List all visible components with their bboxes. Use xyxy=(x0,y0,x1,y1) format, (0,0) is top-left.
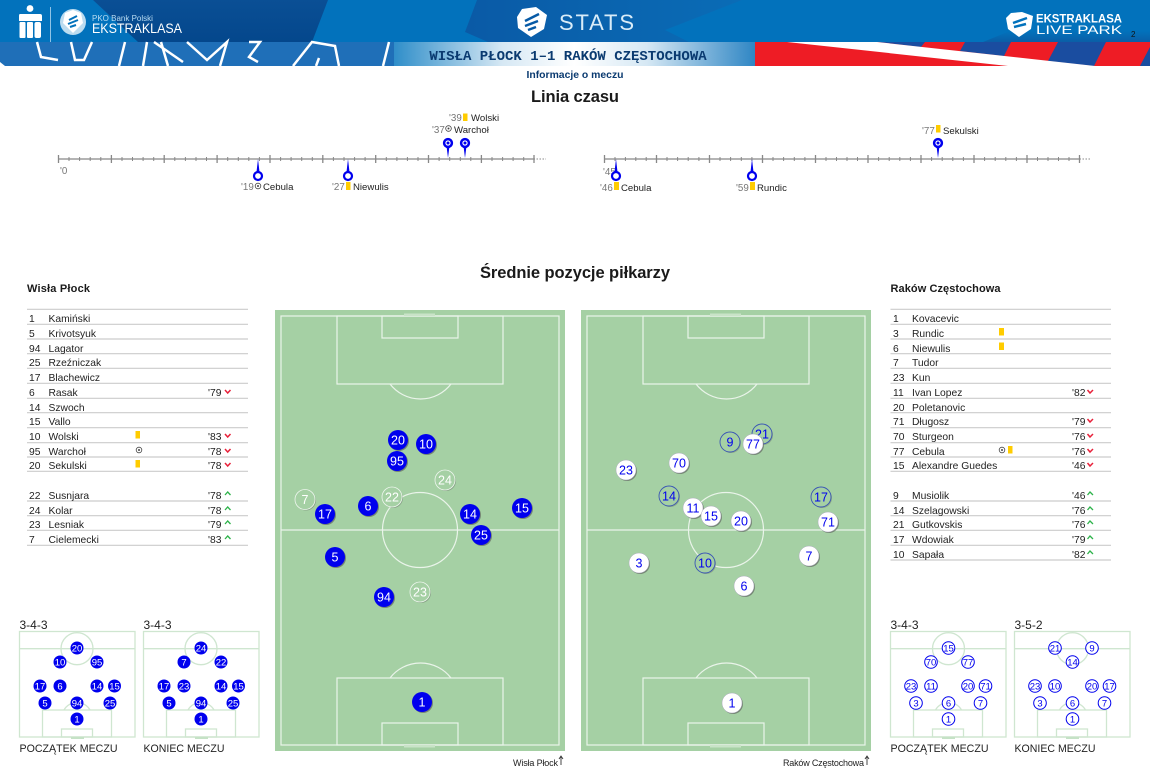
substitutes: Susnjara xyxy=(48,491,89,502)
formation: Raków end: 3 xyxy=(1037,698,1043,710)
formation: Wisła start: 3-4-3 xyxy=(20,618,48,632)
player markers: 17 xyxy=(814,490,828,504)
starting players: Długosz xyxy=(912,417,949,428)
starting players: Krivotsyuk xyxy=(48,329,97,340)
event: 37 Warchoł goal xyxy=(432,125,490,158)
formation: Wisła start: 20 xyxy=(72,644,82,654)
formation: Raków end xyxy=(1014,618,1130,755)
player markers: 70 xyxy=(672,456,686,470)
starting players: 11 xyxy=(893,388,904,399)
formation: Wisła end: 15 xyxy=(233,682,244,692)
starting players: '76 xyxy=(1072,447,1086,458)
header bar xyxy=(0,0,1150,42)
formation: Wisła end: KONIEC MECZU xyxy=(144,743,224,755)
starting players: 1 xyxy=(893,314,899,325)
player markers: 20 xyxy=(734,514,748,528)
starting players: '82 xyxy=(1072,388,1086,399)
event: 39 Wolski card: Wolski xyxy=(471,113,499,124)
formation: Raków end: 21 xyxy=(1050,644,1060,654)
starting players: 6 xyxy=(29,388,35,399)
player markers: 22 xyxy=(385,490,399,504)
event: 27 Niewulis card: Niewulis xyxy=(353,182,389,193)
starting players: Warchoł xyxy=(48,447,87,458)
starting players: 17 xyxy=(29,373,41,384)
formation: Wisła end xyxy=(144,618,259,755)
player markers: 21 xyxy=(755,428,769,442)
substitutes: '79 xyxy=(1072,535,1086,546)
text: Ekstraklasa Live Park: LIVE PARK xyxy=(1036,25,1122,37)
formation: Wisła end: 22 xyxy=(216,658,226,668)
formation: Wisła end: 5 xyxy=(166,698,172,710)
axis xyxy=(604,155,1091,163)
icon: Ekstraklasa ball logo xyxy=(60,9,86,35)
timeline: second half xyxy=(600,125,1091,194)
formation: Raków start: 6 xyxy=(946,698,951,710)
starting players: 95 xyxy=(29,447,41,458)
event: 27 Niewulis card xyxy=(332,159,389,193)
event: 59 Rundic card xyxy=(736,159,787,194)
substitutes: Musiolik xyxy=(912,491,950,502)
substitutes: Szelagowski xyxy=(912,506,969,517)
player markers: 20 xyxy=(391,434,405,448)
icon: Live Park shield xyxy=(1006,12,1033,37)
starting players: '46 xyxy=(1072,461,1086,472)
starting players: 20 xyxy=(893,403,905,414)
starting players: 10 xyxy=(29,432,41,443)
axis start label: '0 xyxy=(60,166,68,177)
player markers: 77 xyxy=(746,438,760,452)
player markers: 95 xyxy=(390,454,404,468)
starting players: Ivan Lopez xyxy=(912,388,962,399)
formation: Wisła start: 25 xyxy=(105,698,115,710)
starting players: '76 xyxy=(1072,432,1086,443)
axis xyxy=(58,155,546,163)
heading: timeline: Linia czasu xyxy=(531,88,619,106)
starting players: 7 xyxy=(893,358,899,369)
starting players: Kamiński xyxy=(48,314,90,325)
substitutes: 17 xyxy=(893,535,905,546)
starting players xyxy=(29,314,222,472)
event: 46 Cebula card: '46 xyxy=(600,183,613,194)
starting players: 70 xyxy=(893,432,905,443)
substitutes: 22 xyxy=(29,491,41,502)
substitutes: 9 xyxy=(893,491,899,502)
substitutes: 23 xyxy=(29,520,41,531)
player markers: 5 xyxy=(332,550,339,564)
formation: Wisła start: 10 xyxy=(55,658,65,668)
team name: Raków Częstochowa xyxy=(890,283,1001,295)
starting players: Sekulski xyxy=(48,461,87,472)
starting players: Szwoch xyxy=(48,403,85,414)
formation: Wisła start: 14 xyxy=(92,682,102,692)
pitch: Raków Częstochowa average positions xyxy=(581,310,871,751)
starting players: 3 xyxy=(893,329,899,340)
starting players: 23 xyxy=(893,373,905,384)
event: 46 Cebula card: Cebula xyxy=(621,183,652,194)
starting players: 14 xyxy=(29,403,41,414)
event: 77 Sekulski card: '77 xyxy=(922,126,935,137)
text: Ekstraklasa Live Park xyxy=(1036,14,1122,37)
formation: Wisła start: 1 xyxy=(74,714,80,726)
formation: Wisła end: 25 xyxy=(228,698,238,710)
text: PKO Bank Polski: PKO Bank Polski xyxy=(92,14,153,23)
substitutes: '79 xyxy=(208,520,222,531)
player markers: 9 xyxy=(727,436,734,450)
substitutes: '76 xyxy=(1072,506,1086,517)
event: 77 Sekulski card xyxy=(922,125,979,158)
player markers: 7 xyxy=(302,493,309,507)
divider xyxy=(50,7,51,42)
player markers: 7 xyxy=(806,550,813,564)
substitutes: '76 xyxy=(1072,520,1086,531)
substitutes: '78 xyxy=(208,506,222,517)
event: 59 Rundic card: Rundic xyxy=(757,183,787,194)
starting players: 25 xyxy=(29,358,41,369)
formation: Raków start: 15 xyxy=(943,644,954,654)
formation: Raków start: 20 xyxy=(963,682,973,692)
formation: Raków start: 71 xyxy=(980,682,991,692)
substitutes: Wdowiak xyxy=(912,535,955,546)
starting players: 20 xyxy=(29,461,41,472)
formation: Raków start: 7 xyxy=(978,698,983,710)
starting players: Blachewicz xyxy=(48,373,100,384)
formation: Raków end: 3-5-2 xyxy=(1014,618,1043,632)
formation: Raków start: 3-4-3 xyxy=(890,618,919,632)
caption: Raków Częstochowa attack direction: Raków Częstochowa xyxy=(783,758,864,768)
starting players: 1 xyxy=(29,314,35,325)
formation: Wisła end: 23 xyxy=(179,682,189,692)
substitutes: '82 xyxy=(1072,550,1086,561)
substitutes xyxy=(893,491,1086,561)
event: 39 Wolski card xyxy=(449,113,499,158)
icon: Ekstraklasa shield xyxy=(517,7,547,37)
player markers: 14 xyxy=(662,490,676,504)
player markers: 6 xyxy=(365,500,372,514)
player markers: 71 xyxy=(821,516,835,530)
formation: Raków end: 20 xyxy=(1087,682,1097,692)
team name: Wisła Płock xyxy=(27,283,91,295)
substitutes: Sapała xyxy=(912,550,944,561)
substitutes: '83 xyxy=(208,535,222,546)
substitutes: Cielemecki xyxy=(48,535,99,546)
starting players: '79 xyxy=(208,388,222,399)
formation: Raków end: 14 xyxy=(1067,658,1078,668)
player markers: 3 xyxy=(636,556,643,570)
icon: PKO logo xyxy=(19,5,42,38)
heading: match info: Informacje o meczu xyxy=(526,70,624,81)
starting players: 94 xyxy=(29,344,41,355)
formation: Wisła end: 7 xyxy=(181,658,187,668)
event: 19 Cebula goal: Cebula xyxy=(263,182,294,193)
formation: Raków start: 3 xyxy=(913,698,919,710)
player markers: 10 xyxy=(698,556,712,570)
starting players: 71 xyxy=(893,417,905,428)
event: 27 Niewulis card: '27 xyxy=(332,182,345,193)
timeline: first half xyxy=(58,113,546,193)
formation: Wisła end: 24 xyxy=(196,644,206,654)
player markers: 6 xyxy=(741,580,748,594)
player markers xyxy=(295,430,533,713)
substitutes: 7 xyxy=(29,535,35,546)
formation: Raków end: 17 xyxy=(1104,682,1115,692)
pitch: Wisła Płock average positions xyxy=(275,310,565,751)
starting players: Niewulis xyxy=(912,344,950,355)
text: STATS: STATS xyxy=(559,10,634,35)
starting players: '83 xyxy=(208,432,222,443)
row lines xyxy=(890,309,1111,560)
formation: Raków start: 11 xyxy=(926,682,936,692)
cards and goals xyxy=(136,431,142,468)
starting players: 5 xyxy=(29,329,35,340)
formation: Raków start: 70 xyxy=(926,658,936,668)
substitutes: Kolar xyxy=(48,506,73,517)
substitutes: 21 xyxy=(893,520,905,531)
starting players: 15 xyxy=(893,461,905,472)
player markers: 24 xyxy=(438,474,452,488)
formation: Wisła start: 15 xyxy=(109,682,120,692)
row lines xyxy=(27,309,248,545)
formation: Wisła start: POCZĄTEK MECZU xyxy=(20,743,118,755)
starting players: Cebula xyxy=(912,447,945,458)
event: 46 Cebula card xyxy=(600,159,652,194)
event: 19 Cebula goal xyxy=(241,159,294,193)
starting players: Rasak xyxy=(48,388,79,399)
formation: Raków end: 1 xyxy=(1070,714,1075,726)
starting players: 15 xyxy=(29,417,41,428)
substitutes: '78 xyxy=(208,491,222,502)
team table: Raków Częstochowa xyxy=(890,283,1111,561)
formation: Raków end: 6 xyxy=(1070,698,1075,710)
player markers: 23 xyxy=(413,586,427,600)
formation: Raków start: 77 xyxy=(963,658,973,668)
formation: Wisła end: 3-4-3 xyxy=(144,618,172,632)
starting players: Vallo xyxy=(48,417,71,428)
starting players: Tudor xyxy=(912,358,939,369)
substitutes: '46 xyxy=(1072,491,1086,502)
player markers: 17 xyxy=(318,508,332,522)
starting players: '78 xyxy=(208,461,222,472)
formation: Wisła start: 5 xyxy=(42,698,48,710)
caption: Wisła Płock attack direction: Wisła Płock xyxy=(513,758,558,768)
starting players: '79 xyxy=(1072,417,1086,428)
substitutes: 24 xyxy=(29,506,41,517)
event: 77 Sekulski card: Sekulski xyxy=(943,126,979,137)
player markers: 1 xyxy=(419,696,426,710)
formation: Raków end: 10 xyxy=(1050,682,1060,692)
player markers xyxy=(616,424,839,714)
player markers: 23 xyxy=(619,464,633,478)
substitution arrows xyxy=(1088,390,1093,554)
match title: WISŁA PŁOCK 1–1 RAKÓW CZĘSTOCHOWA xyxy=(429,47,707,65)
formation: Wisła end: 1 xyxy=(198,714,204,726)
formation: Raków start: 1 xyxy=(946,714,951,726)
formation: Wisła start: 17 xyxy=(35,682,45,692)
formation: Raków start: 23 xyxy=(906,682,916,692)
formation: Raków start: POCZĄTEK MECZU xyxy=(890,743,988,755)
axis start label: '45 xyxy=(603,167,616,178)
starting players: Lagator xyxy=(48,344,84,355)
substitutes: 10 xyxy=(893,550,905,561)
event: 37 Warchoł goal: '37 xyxy=(432,125,445,136)
formation: Raków start xyxy=(890,618,1006,755)
starting players: 6 xyxy=(893,344,899,355)
formation: Wisła start: 6 xyxy=(57,682,63,692)
formation: Wisła end: 94 xyxy=(196,698,206,710)
player markers: 15 xyxy=(704,510,718,524)
substitutes xyxy=(29,491,222,546)
starting players: Rzeźniczak xyxy=(48,358,102,369)
formation: Wisła end: 17 xyxy=(159,682,169,692)
substitutes: Lesniak xyxy=(48,520,85,531)
event: 39 Wolski card: '39 xyxy=(449,113,462,124)
player markers: 15 xyxy=(515,502,529,516)
starting players: '78 xyxy=(208,447,222,458)
starting players xyxy=(893,314,1086,472)
player markers: 11 xyxy=(687,502,700,516)
player markers: 10 xyxy=(419,438,433,452)
player markers: 1 xyxy=(729,696,736,710)
substitutes: 14 xyxy=(893,506,905,517)
starting players: 77 xyxy=(893,447,905,458)
starting players: Sturgeon xyxy=(912,432,954,443)
formation: Raków end: 9 xyxy=(1089,644,1095,654)
decorative strip xyxy=(0,42,1150,66)
starting players: Rundic xyxy=(912,329,944,340)
formation: Wisła start: 94 xyxy=(72,698,82,710)
substitution arrows xyxy=(225,390,230,539)
text: Ekstraklasa: EKSTRAKLASA xyxy=(92,21,182,36)
starting players: Kun xyxy=(912,373,931,384)
team table: Wisła Płock xyxy=(27,283,248,546)
formation: Raków end: KONIEC MECZU xyxy=(1014,743,1096,755)
formation: Raków end: 23 xyxy=(1030,682,1040,692)
formation: Wisła start: 95 xyxy=(92,658,102,668)
heading: average positions: Średnie pozycje piłkarzy xyxy=(480,263,671,282)
text: Ekstraklasa Live Park: EKSTRAKLASA xyxy=(1036,14,1122,26)
player markers: 94 xyxy=(377,590,391,604)
formation: Wisła end: 14 xyxy=(216,682,226,692)
starting players: Kovacevic xyxy=(912,314,959,325)
event: 59 Rundic card: '59 xyxy=(736,183,749,194)
event: 19 Cebula goal: '19 xyxy=(241,182,254,193)
formation: Wisła start xyxy=(20,618,135,755)
player markers: 25 xyxy=(474,528,488,542)
starting players: Alexandre Guedes xyxy=(912,461,997,472)
cards and goals xyxy=(999,328,1012,454)
starting players: Wolski xyxy=(48,432,79,443)
starting players: Poletanovic xyxy=(912,403,965,414)
page number: 2 xyxy=(1131,30,1136,39)
substitutes: Gutkovskis xyxy=(912,520,962,531)
player markers: 14 xyxy=(463,508,477,522)
formation: Raków end: 7 xyxy=(1102,698,1107,710)
event: 37 Warchoł goal: Warchoł xyxy=(454,125,490,136)
